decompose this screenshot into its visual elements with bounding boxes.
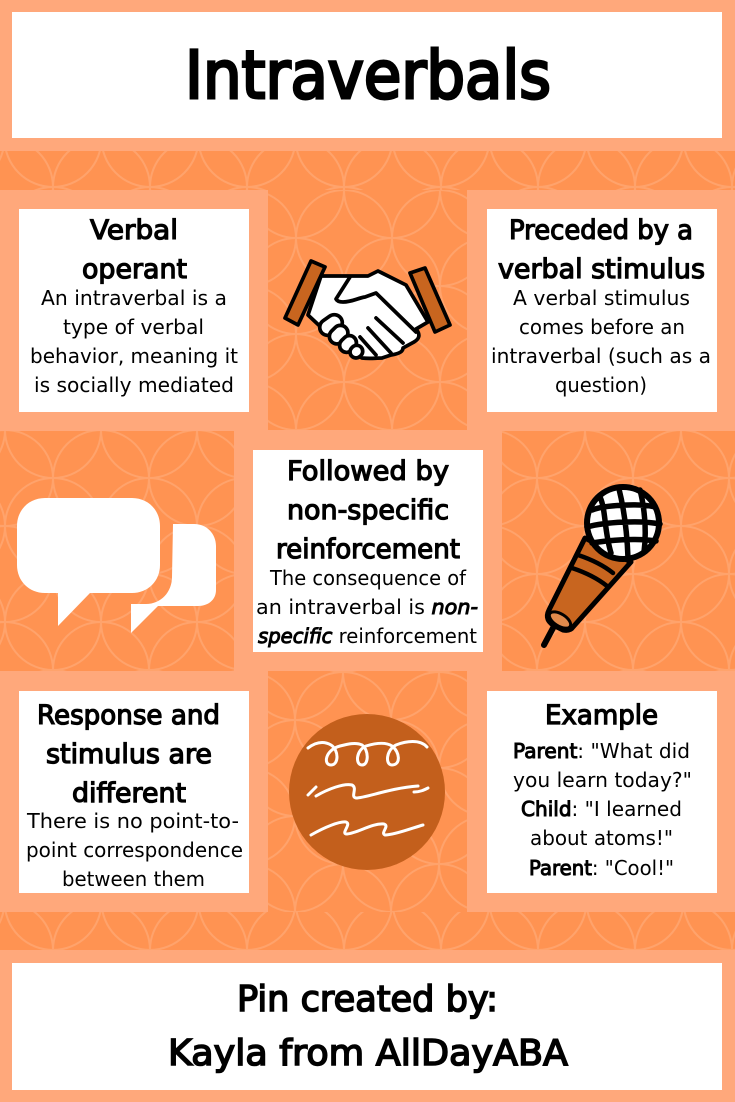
text: preceded description: intraverbal (such as a — [491, 344, 711, 368]
text: verbal operant description — [30, 286, 238, 397]
patterned band: top — [0, 151, 735, 190]
text: response description: between them — [62, 867, 205, 891]
heading: response and stimulus are different: different — [72, 778, 186, 809]
heading: example: Example — [545, 700, 658, 731]
icon: scribble circle — [289, 714, 445, 870]
heading: preceded by a verbal stimulus: verbal stimulus — [498, 254, 705, 285]
text: preceded description: comes before an — [519, 315, 685, 339]
panel: verbal operant — [0, 190, 268, 431]
panel: followed by non-specific reinforcement — [234, 431, 502, 671]
patterned band: bottom — [0, 912, 735, 950]
text: preceded description: A verbal stimulus — [513, 286, 690, 310]
heading: response and stimulus are different — [37, 700, 220, 809]
icon: microphone — [544, 487, 660, 645]
text: example dialogue: about atoms!" — [530, 826, 673, 850]
panel: handshake tile — [268, 190, 467, 430]
panel: speech bubbles tile — [0, 431, 234, 671]
text: example dialogue: Child: "I learned — [521, 797, 682, 821]
icon: handshake — [285, 261, 450, 360]
heading: followed by non-specific reinforcement: reinforcement — [276, 534, 460, 565]
text: preceded description — [491, 286, 711, 397]
title: Intraverbals — [185, 37, 551, 114]
text: verbal operant description: An intraverbal is a — [41, 286, 227, 310]
text: response description: point correspondence — [26, 838, 243, 862]
heading: verbal operant: operant — [82, 254, 187, 285]
heading: response and stimulus are different: stimulus are — [46, 739, 212, 770]
title panel — [12, 12, 722, 138]
text: example dialogue: Parent: "What did — [513, 739, 690, 763]
credit text — [168, 979, 568, 1074]
icon: speech bubbles — [17, 498, 216, 633]
heading: verbal operant — [82, 215, 187, 285]
panel: scribble tile — [268, 671, 467, 912]
panel: preceded by a verbal stimulus — [467, 190, 735, 431]
heading: followed by non-specific reinforcement: Followed by — [287, 456, 449, 487]
panel: response and stimulus are different — [0, 671, 268, 912]
text: followed description — [256, 566, 478, 648]
text: response description: There is no point-to- — [26, 809, 239, 833]
panel: microphone tile — [502, 431, 735, 671]
text: response description — [26, 809, 243, 891]
credit text: Pin created by: — [237, 979, 498, 1020]
text: example dialogue — [513, 739, 692, 880]
text: verbal operant description: type of verbal — [63, 315, 204, 339]
panel: example — [467, 671, 735, 912]
text: example dialogue: Parent: "Cool!" — [529, 856, 674, 880]
text: followed description: specific reinforcement — [258, 624, 477, 648]
heading: preceded by a verbal stimulus: Preceded by a — [509, 215, 693, 246]
heading: verbal operant: Verbal — [90, 215, 178, 246]
text: verbal operant description: behavior, meaning it — [30, 344, 238, 368]
heading: followed by non-specific reinforcement — [276, 456, 460, 565]
text: preceded description: question) — [555, 373, 647, 397]
heading: response and stimulus are different: Response and — [37, 700, 220, 731]
credit text: Kayla from AllDayABA — [168, 1033, 568, 1074]
text: example dialogue: you learn today?" — [513, 768, 692, 792]
heading: followed by non-specific reinforcement: non-specific — [287, 495, 449, 526]
text: verbal operant description: is socially mediated — [34, 373, 234, 397]
text: followed description: an intraverbal is non- — [256, 595, 478, 619]
text: followed description: The consequence of — [269, 566, 467, 590]
credit panel — [12, 963, 722, 1090]
heading: preceded by a verbal stimulus — [498, 215, 705, 285]
